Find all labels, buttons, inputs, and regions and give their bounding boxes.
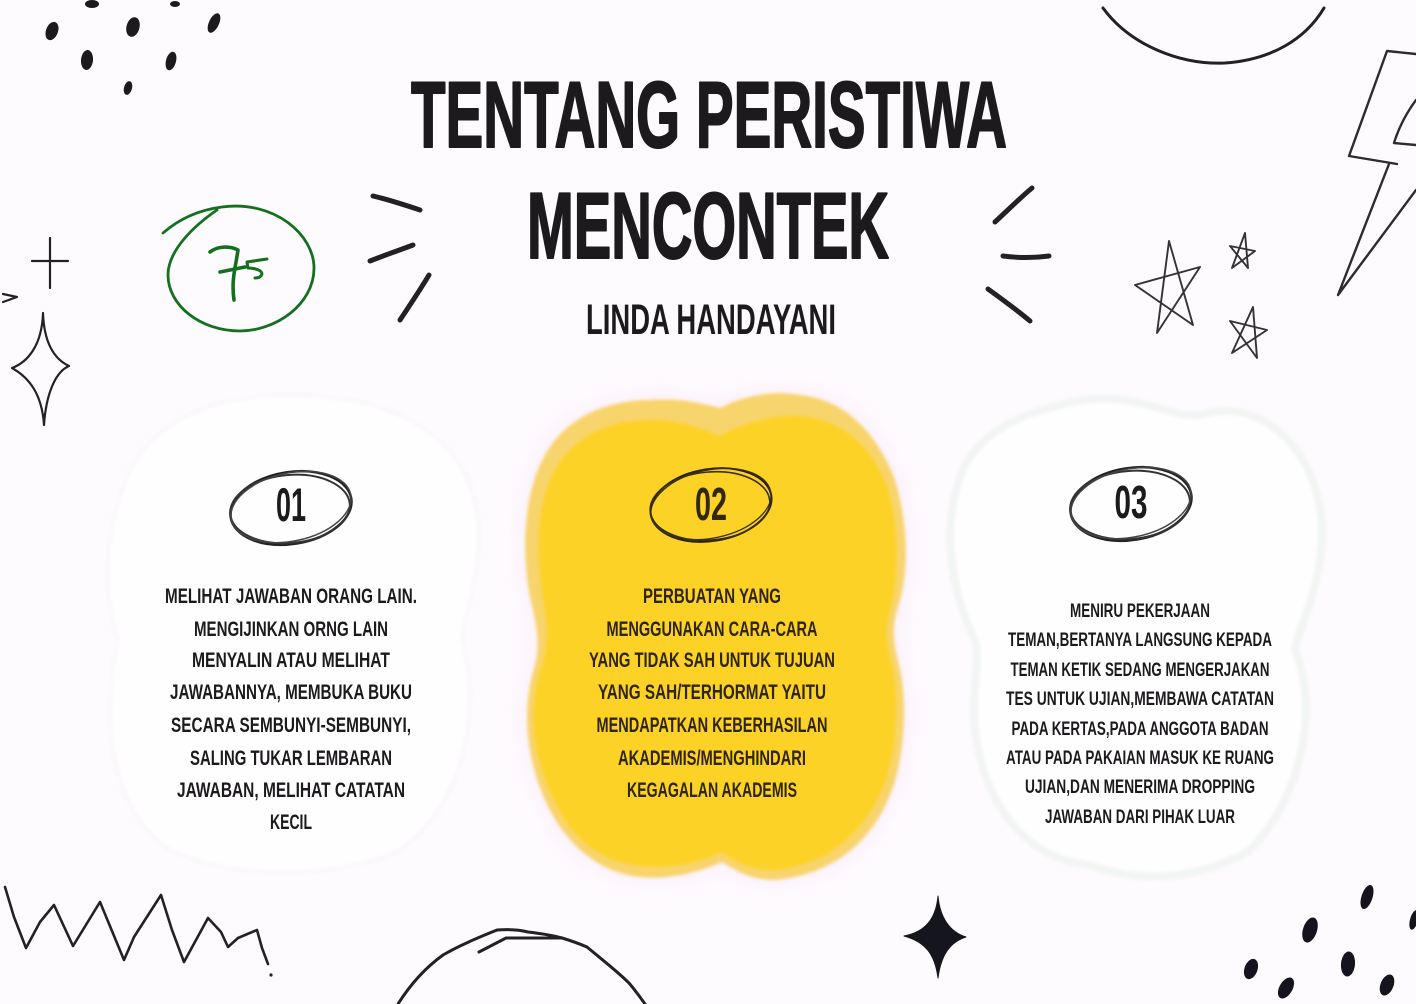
text block 03: UJIAN,DAN MENERIMA DROPPING bbox=[1025, 777, 1255, 798]
badge 02: 02 bbox=[695, 478, 727, 530]
text block 01: MELIHAT JAWABAN ORANG LAIN. bbox=[165, 585, 417, 608]
text block 03: ATAU PADA PAKAIAN MASUK KE RUANG bbox=[1006, 748, 1274, 769]
decoration: arc top right bbox=[1103, 8, 1324, 63]
badge 03 bbox=[1064, 457, 1198, 549]
text block 02 bbox=[589, 585, 835, 802]
text block 02: AKADEMIS/MENGHINDARI bbox=[618, 747, 806, 770]
text block 01: SECARA SEMBUNYI-SEMBUNYI, bbox=[171, 714, 411, 737]
text block 03: PADA KERTAS,PADA ANGGOTA BADAN bbox=[1012, 719, 1268, 740]
text block 02: YANG SAH/TERHORMAT YAITU bbox=[598, 681, 826, 704]
text block 02: PERBUATAN YANG bbox=[643, 585, 781, 608]
title: MENCONTEK bbox=[527, 173, 889, 278]
text block 01: MENGIJINKAN ORNG LAIN bbox=[194, 618, 388, 641]
text block 01 bbox=[165, 585, 417, 834]
badge 02 bbox=[644, 458, 778, 550]
text block 03: TES UNTUK UJIAN,MEMBAWA CATATAN bbox=[1006, 689, 1274, 710]
text block 02: MENGGUNAKAN CARA-CARA bbox=[606, 618, 818, 641]
grade mark: green circled 75 bbox=[163, 206, 314, 331]
badge 01 bbox=[224, 461, 358, 553]
panel: blob 02 yellow bbox=[525, 393, 906, 880]
text block 01: JAWABANNYA, MEMBUKA BUKU bbox=[170, 681, 412, 704]
text block 01: SALING TUKAR LEMBARAN bbox=[190, 747, 392, 770]
badge 03: 03 bbox=[1114, 476, 1148, 528]
text block 03: TEMAN KETIK SEDANG MENGERJAKAN bbox=[1010, 660, 1270, 681]
burst lines left bbox=[370, 196, 429, 320]
decoration: dots top left bbox=[43, 0, 223, 96]
decoration: zigzag bottom left bbox=[5, 887, 273, 977]
decoration: dots bottom right bbox=[1241, 883, 1416, 1001]
text block 03: TEMAN,BERTANYA LANGSUNG KEPADA bbox=[1008, 630, 1272, 651]
badge 01: 01 bbox=[276, 478, 306, 531]
text block 01: KECIL bbox=[270, 811, 312, 834]
text block 01: JAWABAN, MELIHAT CATATAN bbox=[177, 779, 405, 802]
title bbox=[411, 62, 1007, 278]
decoration: arc bottom center bbox=[398, 930, 645, 1004]
subtitle: author: LINDA HANDAYANI bbox=[586, 296, 836, 344]
decoration: solid sparkle bottom bbox=[904, 896, 966, 978]
decoration: lightning bolt bbox=[1338, 51, 1416, 295]
burst lines right bbox=[988, 188, 1049, 321]
text block 03: JAWABAN DARI PIHAK LUAR bbox=[1045, 807, 1235, 828]
title: TENTANG PERISTIWA bbox=[411, 62, 1007, 167]
text block 01: MENYALIN ATAU MELIHAT bbox=[192, 649, 390, 672]
panel: blob 01 bbox=[108, 395, 479, 872]
text block 02: KEGAGALAN AKADEMIS bbox=[627, 779, 797, 802]
panel: blob 03 bbox=[951, 399, 1322, 876]
decoration: outline sparkle left bbox=[12, 313, 69, 425]
text block 03 bbox=[1006, 601, 1274, 828]
text block 02: YANG TIDAK SAH UNTUK TUJUAN bbox=[589, 649, 835, 672]
decoration: stars right bbox=[1135, 233, 1267, 358]
decoration: plus and arrow bbox=[3, 238, 68, 302]
text block 03: MENIRU PEKERJAAN bbox=[1070, 601, 1210, 622]
text block 02: MENDAPATKAN KEBERHASILAN bbox=[596, 714, 828, 737]
